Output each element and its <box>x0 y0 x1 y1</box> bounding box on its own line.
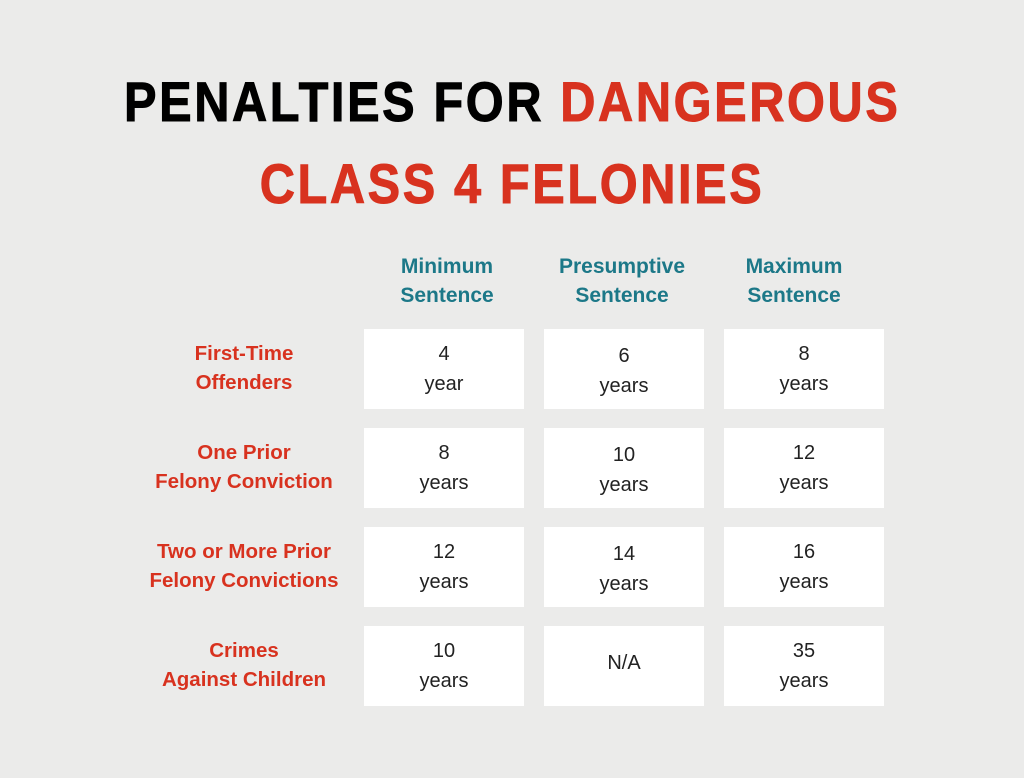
row label 1: Offenders <box>196 371 292 394</box>
row label 4 <box>162 639 326 691</box>
cell: 4 <box>438 343 450 365</box>
header: minimum: Sentence <box>400 284 494 307</box>
row label 2: Felony Conviction <box>155 470 333 493</box>
cell <box>724 527 884 607</box>
row label 4: Against Children <box>162 668 326 691</box>
row label 3 <box>149 540 339 592</box>
cell: years <box>420 472 468 494</box>
cell <box>364 329 524 409</box>
cell <box>364 626 524 706</box>
cell: 6 <box>618 345 630 367</box>
title line 2: CLASS 4 FELONIES <box>260 152 764 215</box>
row label 4: Crimes <box>209 639 279 662</box>
row label 2 <box>155 441 333 493</box>
cell <box>724 626 884 706</box>
cell: 12 <box>433 541 455 563</box>
cell: 8 <box>438 442 450 464</box>
cell: 10 <box>613 444 635 466</box>
cell <box>544 527 704 607</box>
cell <box>544 626 704 706</box>
cell: years <box>780 670 828 692</box>
cell: 16 <box>793 541 815 563</box>
cell: years <box>780 472 828 494</box>
row label 3: Felony Convictions <box>149 569 339 592</box>
row label 3: Two or More Prior <box>157 540 331 563</box>
cell: years <box>780 571 828 593</box>
row label 1 <box>195 342 293 394</box>
cell: 10 <box>433 640 455 662</box>
cell: years <box>600 474 648 496</box>
cell: years <box>420 670 468 692</box>
cell <box>544 329 704 409</box>
cell: N/A <box>607 652 641 674</box>
header: maximum: Maximum <box>746 255 842 278</box>
header: maximum: Sentence <box>747 284 841 307</box>
cell: years <box>780 373 828 395</box>
header: presumptive: Sentence <box>575 284 669 307</box>
cell: 35 <box>793 640 815 662</box>
title: PENALTIES FOR DANGEROUS <box>124 70 900 133</box>
header: maximum <box>746 255 842 307</box>
row label 1: First-Time <box>195 342 293 365</box>
header: presumptive: Presumptive <box>559 255 685 278</box>
cell <box>544 428 704 508</box>
cell <box>724 329 884 409</box>
cell: 14 <box>613 543 635 565</box>
header: presumptive <box>559 255 685 307</box>
header: minimum: Minimum <box>401 255 493 278</box>
cell <box>724 428 884 508</box>
cell <box>364 428 524 508</box>
cell: years <box>600 573 648 595</box>
cell <box>364 527 524 607</box>
header: minimum <box>400 255 494 307</box>
cell: year <box>425 373 463 395</box>
row label 2: One Prior <box>197 441 291 464</box>
cell: 12 <box>793 442 815 464</box>
cell: 8 <box>798 343 810 365</box>
cell: years <box>600 375 648 397</box>
cell: years <box>420 571 468 593</box>
